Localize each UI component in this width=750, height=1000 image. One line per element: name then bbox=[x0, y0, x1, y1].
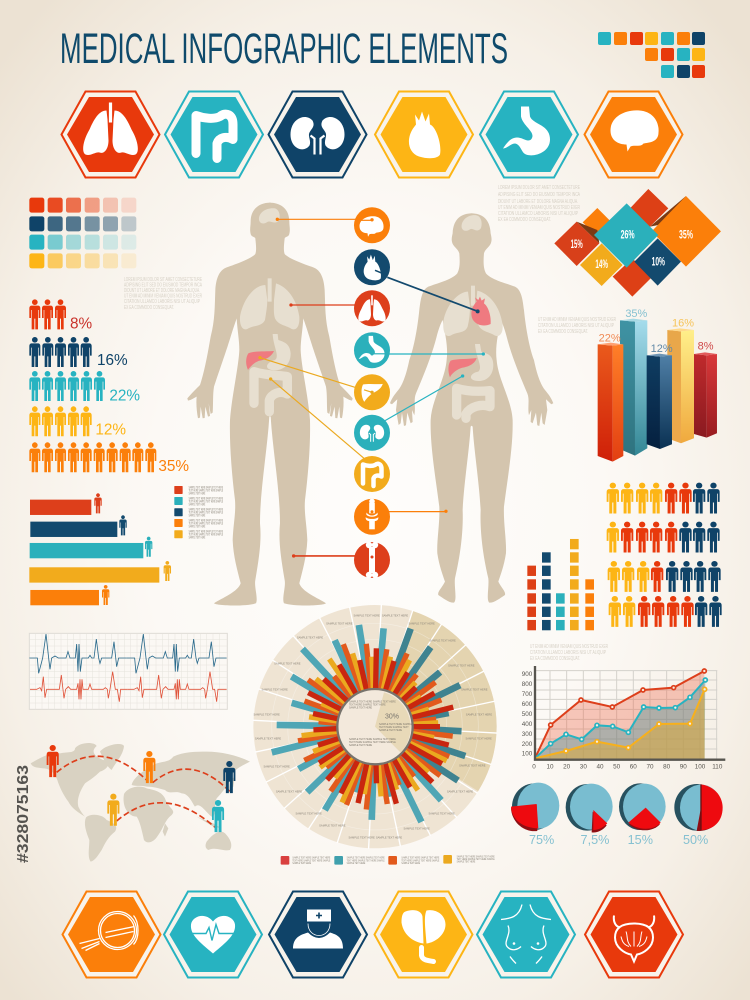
sector labels: SAMPLE TEXT HERE bbox=[461, 687, 488, 691]
text block above line chart: UT ENIM AD MINIM VENIAM QUIS NOSTRUD EXER bbox=[530, 644, 608, 650]
icon: kidneys circle bbox=[354, 415, 390, 451]
bar 8%: 8% bbox=[698, 341, 714, 353]
icon: lungs circle bbox=[354, 290, 390, 326]
radial chart legend: SAMPLE TEXT HERE bbox=[347, 861, 365, 865]
axis labels: 50 bbox=[613, 763, 621, 770]
icon: brain circle bbox=[354, 207, 390, 243]
text block top right: DIDUNT UT LABORE ET DOLORE MAGNA ALIQUA. bbox=[498, 199, 578, 205]
sector labels: SAMPLE TEXT HERE bbox=[348, 835, 375, 839]
text block left: CITATION ULLAMCO LABORIS NISI UT ALIQUIP bbox=[124, 299, 200, 305]
text block left: EX EA COMMODO CONSEQUAT. bbox=[124, 305, 174, 311]
axis labels: 110 bbox=[712, 763, 723, 770]
sector labels: SAMPLE TEXT HERE bbox=[459, 764, 486, 768]
map people bbox=[47, 745, 235, 832]
radial chart legend: TEXT HERE SAMPLE TEXT HERE SAMPLE bbox=[457, 857, 495, 861]
row 35%: 35% bbox=[158, 458, 189, 475]
connector lines bbox=[260, 219, 483, 556]
sector labels: SAMPLE TEXT HERE bbox=[295, 812, 322, 816]
connector dots bbox=[258, 218, 485, 558]
radial chart legend: TEXT HERE SAMPLE TEXT HERE SAMPLE bbox=[401, 858, 439, 862]
axis labels: 800 bbox=[522, 681, 533, 688]
sector labels: SAMPLE TEXT HERE bbox=[261, 687, 288, 691]
centre disc with 30% pie bbox=[337, 689, 413, 764]
bar 22%: 22% bbox=[599, 333, 621, 345]
radial chart legend bbox=[281, 854, 495, 865]
row 12% bbox=[29, 406, 126, 438]
axis labels bbox=[522, 671, 723, 770]
hexagon: heart with pulse bbox=[164, 892, 262, 978]
bars legend: SAMPLE TEXT HERE SAMPLE TEXT HERE bbox=[189, 530, 223, 534]
radial chart legend: TEXT HERE SAMPLE TEXT HERE SAMPLE bbox=[292, 858, 330, 862]
axis labels: 400 bbox=[522, 721, 533, 728]
radial chart legend: SAMPLE TEXT HERE SAMPLE TEXT HERE bbox=[401, 856, 439, 860]
pie charts bbox=[511, 783, 723, 847]
sector labels: SAMPLE TEXT HERE bbox=[428, 811, 455, 815]
colour swatch grid bbox=[29, 198, 136, 268]
row 22%: 22% bbox=[109, 387, 140, 404]
bar 16% bbox=[667, 318, 694, 443]
bars legend: SAMPLE TEXT HERE SAMPLE TEXT HERE bbox=[189, 496, 223, 500]
bar 35% bbox=[620, 308, 648, 456]
people percentage rows bbox=[29, 299, 189, 475]
ECG chart bbox=[29, 633, 227, 709]
bars legend: SAMPLE TEXT HERE bbox=[189, 536, 206, 540]
pie 7,5% bbox=[566, 784, 613, 847]
bars legend: SAMPLE TEXT HERE bbox=[189, 524, 206, 528]
axis labels: 200 bbox=[522, 741, 533, 748]
centre disc with 30% pie: SAMPLE TEXT HERE bbox=[349, 706, 373, 709]
hexagon: lungs bbox=[62, 92, 160, 178]
hexagon: intestine bbox=[165, 92, 263, 178]
male figure bbox=[187, 203, 353, 606]
text block mid right: EX EA COMMODO CONSEQUAT. bbox=[538, 329, 588, 335]
bars legend: SAMPLE TEXT HERE SAMPLE TEXT HERE bbox=[189, 518, 223, 522]
radial chart legend: SAMPLE TEXT HERE bbox=[292, 861, 311, 865]
axis labels: 10 bbox=[546, 763, 554, 770]
circular radial chart bbox=[253, 605, 497, 865]
bars legend: SAMPLE TEXT HERE SAMPLE TEXT HERE bbox=[189, 485, 223, 489]
icon: heart circle bbox=[354, 249, 390, 285]
label 10%: 10% bbox=[652, 255, 665, 269]
text block mid right bbox=[538, 317, 616, 335]
text block top right bbox=[498, 185, 580, 223]
sector labels: SAMPLE TEXT HERE bbox=[376, 835, 402, 839]
bar 8% bbox=[694, 341, 717, 438]
bars legend: TEXT HERE SAMPLE TEXT HERE SAMPLE bbox=[189, 511, 223, 515]
horizontal bars with people bbox=[29, 493, 171, 605]
pie 7,5%: 7,5% bbox=[581, 833, 609, 847]
centre disc with 30% pie: SAMPLE TEXT HERE SAMPLE bbox=[379, 723, 413, 726]
icon: joint circle bbox=[354, 498, 390, 535]
sector labels: SAMPLE TEXT HERE bbox=[403, 827, 430, 831]
stock number: #328075163 bbox=[15, 765, 32, 863]
centre disc with 30% pie: TEXT HERE SAMPLE TEXT HERE SAMPLE bbox=[349, 741, 396, 744]
row 8%: 8% bbox=[70, 316, 93, 333]
stacked squares chart bbox=[527, 539, 594, 630]
text block top right: EX EA COMMODO CONSEQUAT. bbox=[498, 217, 551, 223]
radial bars bbox=[271, 624, 466, 823]
radial chart legend: SAMPLE TEXT HERE SAMPLE TEXT HERE bbox=[457, 854, 495, 858]
sector labels: SAMPLE TEXT HERE bbox=[447, 790, 473, 794]
bars legend: SAMPLE TEXT HERE bbox=[189, 514, 206, 518]
hexagon: breasts bbox=[477, 892, 575, 978]
sector labels: SAMPLE TEXT HERE bbox=[326, 622, 353, 626]
pie 50%: 50% bbox=[683, 833, 708, 847]
sector labels: SAMPLE TEXT HERE bbox=[253, 712, 280, 716]
text block top right: UT ENIM AD MINIM VENIAM QUIS NOSTRUD EXER bbox=[498, 205, 580, 211]
bars legend: SAMPLE TEXT HERE bbox=[189, 502, 206, 506]
axis labels: 100 bbox=[522, 751, 533, 758]
sector labels: SAMPLE TEXT HERE bbox=[408, 622, 435, 626]
pie 75%: 75% bbox=[529, 833, 554, 847]
sector labels: SAMPLE TEXT HERE bbox=[263, 765, 290, 769]
axis labels: 60 bbox=[630, 763, 637, 770]
axis labels: 20 bbox=[563, 763, 571, 770]
hexagon: eye bbox=[62, 892, 160, 978]
icon: intestine circle bbox=[354, 456, 390, 492]
sector labels: SAMPLE TEXT HERE bbox=[255, 736, 281, 740]
row 16%: 16% bbox=[97, 352, 128, 369]
hexagon: bladder bbox=[585, 892, 683, 978]
hexagon: stomach bbox=[480, 92, 578, 178]
sector labels: SAMPLE TEXT HERE bbox=[465, 736, 492, 740]
teal area and line bbox=[535, 680, 705, 759]
axis labels: 40 bbox=[596, 763, 604, 770]
text block above line chart: EX EA COMMODO CONSEQUAT. bbox=[530, 656, 580, 662]
sector labels: SAMPLE TEXT HERE bbox=[353, 613, 380, 617]
text block left: ADIPISING ELIT SED DO EIUSMOD TEMPOR INCA bbox=[124, 282, 202, 288]
radial chart legend: TEXT HERE SAMPLE TEXT HERE SAMPLE bbox=[347, 858, 385, 862]
grid bbox=[535, 671, 717, 759]
female liver bbox=[448, 358, 477, 377]
pie 50% bbox=[674, 784, 723, 847]
text block left: LOREM IPSUM DOLOR SIT AMET CONSECTETURE bbox=[124, 277, 202, 283]
text block above line chart bbox=[530, 644, 608, 662]
axis labels: 70 bbox=[646, 763, 654, 770]
sector labels: SAMPLE TEXT HERE bbox=[382, 613, 408, 617]
chart base bbox=[253, 605, 497, 848]
text block mid right: UT ENIM AD MINIM VENIAM QUIS NOSTRUD EXER bbox=[538, 317, 616, 323]
world map bbox=[31, 743, 250, 862]
male organs bbox=[240, 208, 299, 412]
3D bar chart bbox=[598, 308, 717, 462]
female figure bbox=[390, 213, 553, 603]
text block top right: CITATION ULLAMCO LABORIS NISI UT ALIQUIP bbox=[498, 211, 578, 217]
radial chart legend: SAMPLE TEXT HERE bbox=[401, 861, 420, 865]
sector labels: SAMPLE TEXT HERE bbox=[274, 661, 301, 665]
icon: liver circle bbox=[354, 374, 390, 410]
bar 12% bbox=[647, 343, 673, 449]
icon: bone circle bbox=[354, 542, 390, 578]
yellow area and line bbox=[535, 689, 705, 759]
row 35% bbox=[29, 442, 189, 475]
bars legend: TEXT HERE SAMPLE TEXT HERE SAMPLE bbox=[189, 521, 223, 525]
row 12%: 12% bbox=[95, 421, 126, 438]
continents bbox=[31, 743, 250, 862]
text block left: DIDUNT UT LABORE ET DOLORE MAGNA ALIQUA. bbox=[124, 288, 200, 294]
axis labels: 700 bbox=[522, 691, 533, 698]
centre disc with 30% pie: TEXT HERE SAMPLE TEXT bbox=[379, 726, 409, 729]
row 16% bbox=[29, 337, 128, 369]
label 14%: 14% bbox=[595, 257, 608, 271]
diamond percentage chart bbox=[554, 189, 721, 297]
line chart bbox=[522, 666, 725, 770]
axis labels: 90 bbox=[680, 763, 687, 770]
bars legend bbox=[174, 485, 223, 540]
axis labels: 500 bbox=[522, 711, 533, 718]
axis labels: 600 bbox=[522, 701, 533, 708]
hexagon: heart bbox=[375, 92, 473, 178]
pie 75% bbox=[511, 783, 559, 847]
label 35%: 35% bbox=[679, 227, 693, 241]
icon: stomach circle bbox=[354, 332, 390, 368]
bars legend: TEXT HERE SAMPLE TEXT HERE SAMPLE bbox=[189, 533, 223, 537]
text block above line chart: CITATION ULLAMCO LABORIS NISI UT ALIQUIP bbox=[530, 650, 606, 656]
text block left: UT ENIM AD MINIM VENIAM QUIS NOSTRUD EXER bbox=[124, 294, 202, 300]
axis labels: 100 bbox=[695, 763, 706, 770]
text block top right: LOREM IPSUM DOLOR SIT AMET CONSECTETURE bbox=[498, 185, 580, 191]
axes bbox=[535, 666, 725, 760]
sector labels bbox=[253, 613, 492, 839]
red area and line bbox=[535, 671, 704, 759]
dashed arcs bbox=[57, 756, 230, 827]
axis labels: 80 bbox=[663, 763, 671, 770]
radial chart legend: SAMPLE TEXT HERE bbox=[457, 860, 475, 864]
radial chart legend: SAMPLE TEXT HERE SAMPLE TEXT HERE bbox=[347, 856, 385, 860]
bar 16%: 16% bbox=[672, 318, 694, 330]
centre disc with 30% pie: 30% bbox=[385, 714, 399, 721]
centre disc with 30% pie: SAMPLE TEXT HERE SAMPLE TEXT HERE bbox=[349, 700, 396, 703]
axis labels: 900 bbox=[522, 671, 533, 678]
bars legend: TEXT HERE SAMPLE TEXT HERE SAMPLE bbox=[189, 488, 223, 492]
row 22% bbox=[29, 371, 140, 404]
sector labels: SAMPLE TEXT HERE bbox=[429, 639, 456, 643]
bars legend: SAMPLE TEXT HERE SAMPLE TEXT HERE bbox=[189, 508, 223, 512]
hexagon: prostate bbox=[374, 892, 472, 978]
bars legend: TEXT HERE SAMPLE TEXT HERE SAMPLE bbox=[189, 499, 223, 503]
pie 15% bbox=[619, 783, 666, 847]
axis labels: 300 bbox=[522, 731, 533, 738]
label 15%: 15% bbox=[571, 237, 583, 251]
female organs bbox=[443, 215, 503, 418]
colour squares top right bbox=[598, 32, 705, 78]
people matrix bbox=[607, 483, 722, 627]
text block mid right: CITATION ULLAMCO LABORIS NISI UT ALIQUIP bbox=[538, 323, 614, 329]
axis labels: 30 bbox=[580, 763, 587, 770]
bars legend: SAMPLE TEXT HERE bbox=[189, 491, 206, 495]
hexagon: brain bbox=[584, 92, 682, 178]
sector labels: SAMPLE TEXT HERE bbox=[297, 635, 323, 639]
axis labels: 0 bbox=[532, 763, 536, 770]
data points bbox=[549, 669, 707, 753]
hexagon: doctor bbox=[269, 892, 367, 978]
sector labels: SAMPLE TEXT HERE bbox=[448, 663, 475, 667]
sector labels: SAMPLE TEXT HERE bbox=[466, 712, 492, 716]
radial chart legend: SAMPLE TEXT HERE SAMPLE TEXT HERE bbox=[292, 856, 330, 860]
organ icon circles bbox=[354, 207, 390, 578]
row 8% bbox=[29, 299, 93, 333]
bar 12%: 12% bbox=[651, 343, 673, 355]
sector labels: SAMPLE TEXT HERE bbox=[276, 790, 302, 794]
male liver bbox=[246, 351, 274, 370]
pie 15%: 15% bbox=[628, 833, 653, 847]
centre disc with 30% pie: SAMPLE TEXT HERE bbox=[379, 729, 403, 732]
hexagon: kidneys bbox=[268, 92, 366, 178]
bar 35%: 35% bbox=[625, 308, 648, 320]
sector labels: SAMPLE TEXT HERE bbox=[319, 823, 346, 827]
bar 22% bbox=[598, 333, 623, 462]
centre disc with 30% pie: SAMPLE TEXT HERE bbox=[349, 744, 373, 747]
text block top right: ADIPISING ELIT SED DO EIUSMOD TEMPOR INCA bbox=[498, 192, 580, 198]
body diagram bbox=[187, 203, 553, 606]
centre disc with 30% pie: TEXT HERE SAMPLE TEXT HERE bbox=[349, 703, 386, 706]
label 26%: 26% bbox=[621, 227, 635, 241]
centre disc with 30% pie: SAMPLE TEXT HERE SAMPLE TEXT HERE bbox=[349, 738, 396, 741]
text block left bbox=[124, 277, 202, 311]
female heart bbox=[471, 297, 491, 325]
